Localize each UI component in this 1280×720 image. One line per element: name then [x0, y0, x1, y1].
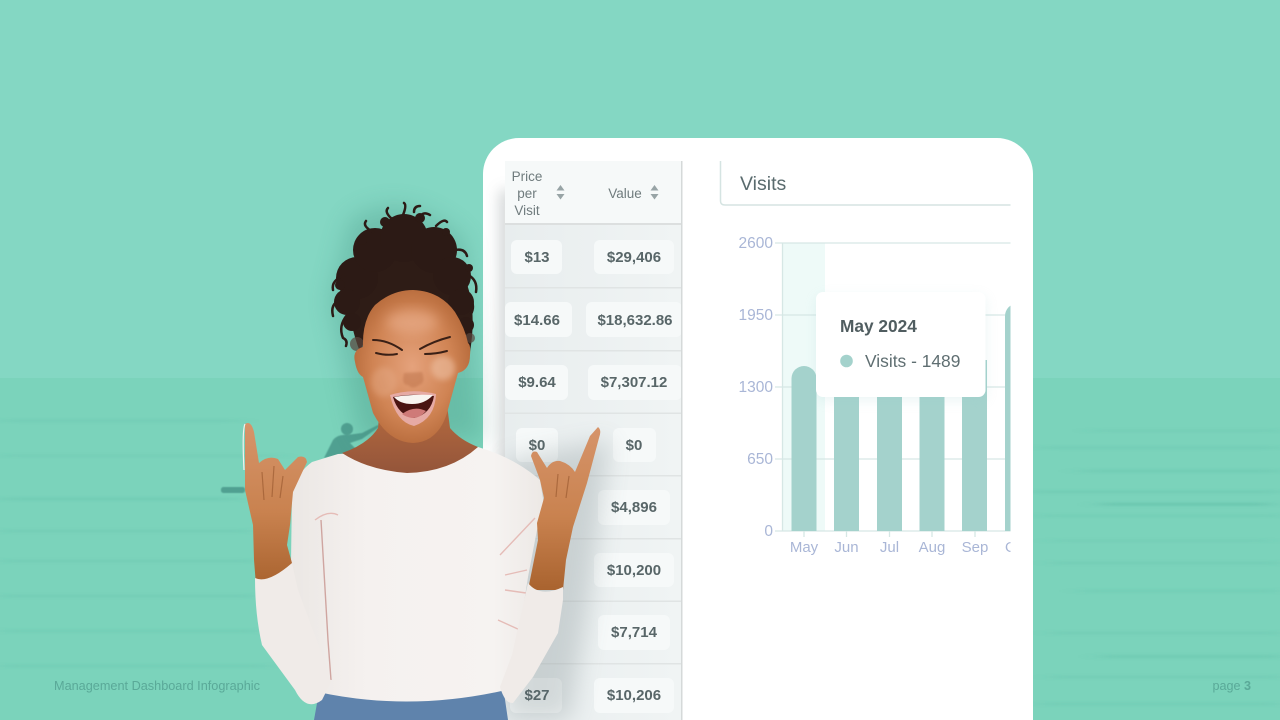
bar chart: Jul [880, 539, 899, 556]
footer title: Management Dashboard Infographic [54, 679, 261, 693]
bar chart: May [790, 539, 819, 556]
table cells: $10,200 [607, 562, 661, 579]
bar chart: 650 [747, 451, 773, 468]
bar chart [739, 235, 1029, 556]
hair [332, 203, 476, 352]
bar chart: Sep [962, 539, 988, 556]
bar chart: 1950 [739, 307, 773, 324]
bar chart: Aug [919, 539, 945, 556]
table cells: $18,632.86 [597, 312, 673, 329]
dashboard panel [483, 138, 1033, 720]
table header: Value [608, 186, 642, 201]
neck [342, 405, 478, 473]
right sleeve [500, 583, 563, 703]
nose [403, 372, 423, 388]
row separators [505, 287, 682, 664]
table header: Visit [514, 203, 540, 218]
table cells: $14.66 [514, 312, 560, 329]
left sleeve [255, 563, 331, 704]
face [354, 290, 470, 443]
tooltip [816, 292, 986, 401]
table cells: $9.64 [518, 374, 556, 391]
table cells [505, 240, 682, 713]
visits heading [720, 161, 1010, 205]
table header: Price [512, 169, 542, 184]
bar chart: 0 [764, 523, 773, 540]
bar chart: 2600 [739, 235, 773, 252]
page number: page 3 [1212, 679, 1251, 693]
table cells: $0 [626, 437, 642, 454]
right arm and sleeve [500, 427, 600, 703]
person [243, 203, 610, 720]
table cells: $7,307.12 [601, 374, 667, 391]
table cells: $27 [524, 687, 550, 704]
tooltip: Visits - 1489 [865, 351, 960, 371]
bar chart: Jun [834, 539, 859, 556]
shirt [291, 447, 544, 702]
mouth [390, 391, 436, 426]
table cells: $0 [529, 437, 545, 454]
jeans [314, 686, 508, 720]
table cells: $7,714 [611, 624, 658, 641]
bar chart: Oct [1005, 539, 1029, 556]
table header: per [517, 186, 537, 201]
table cells: $10,206 [607, 687, 661, 704]
table cells: $4,896 [611, 499, 657, 516]
visits heading: Visits [740, 173, 786, 195]
left arm and sleeve [243, 423, 331, 704]
person shadow on panel [505, 440, 610, 720]
eyebrows and eyes [373, 337, 450, 355]
table [505, 161, 682, 720]
table cells: $13 [524, 249, 550, 266]
person shadow on background [330, 206, 483, 440]
surfer silhouette [221, 423, 379, 493]
table header [505, 161, 682, 225]
tooltip: May 2024 [840, 316, 917, 336]
table cells: $29,406 [607, 249, 661, 266]
bar chart: 1300 [739, 379, 773, 396]
